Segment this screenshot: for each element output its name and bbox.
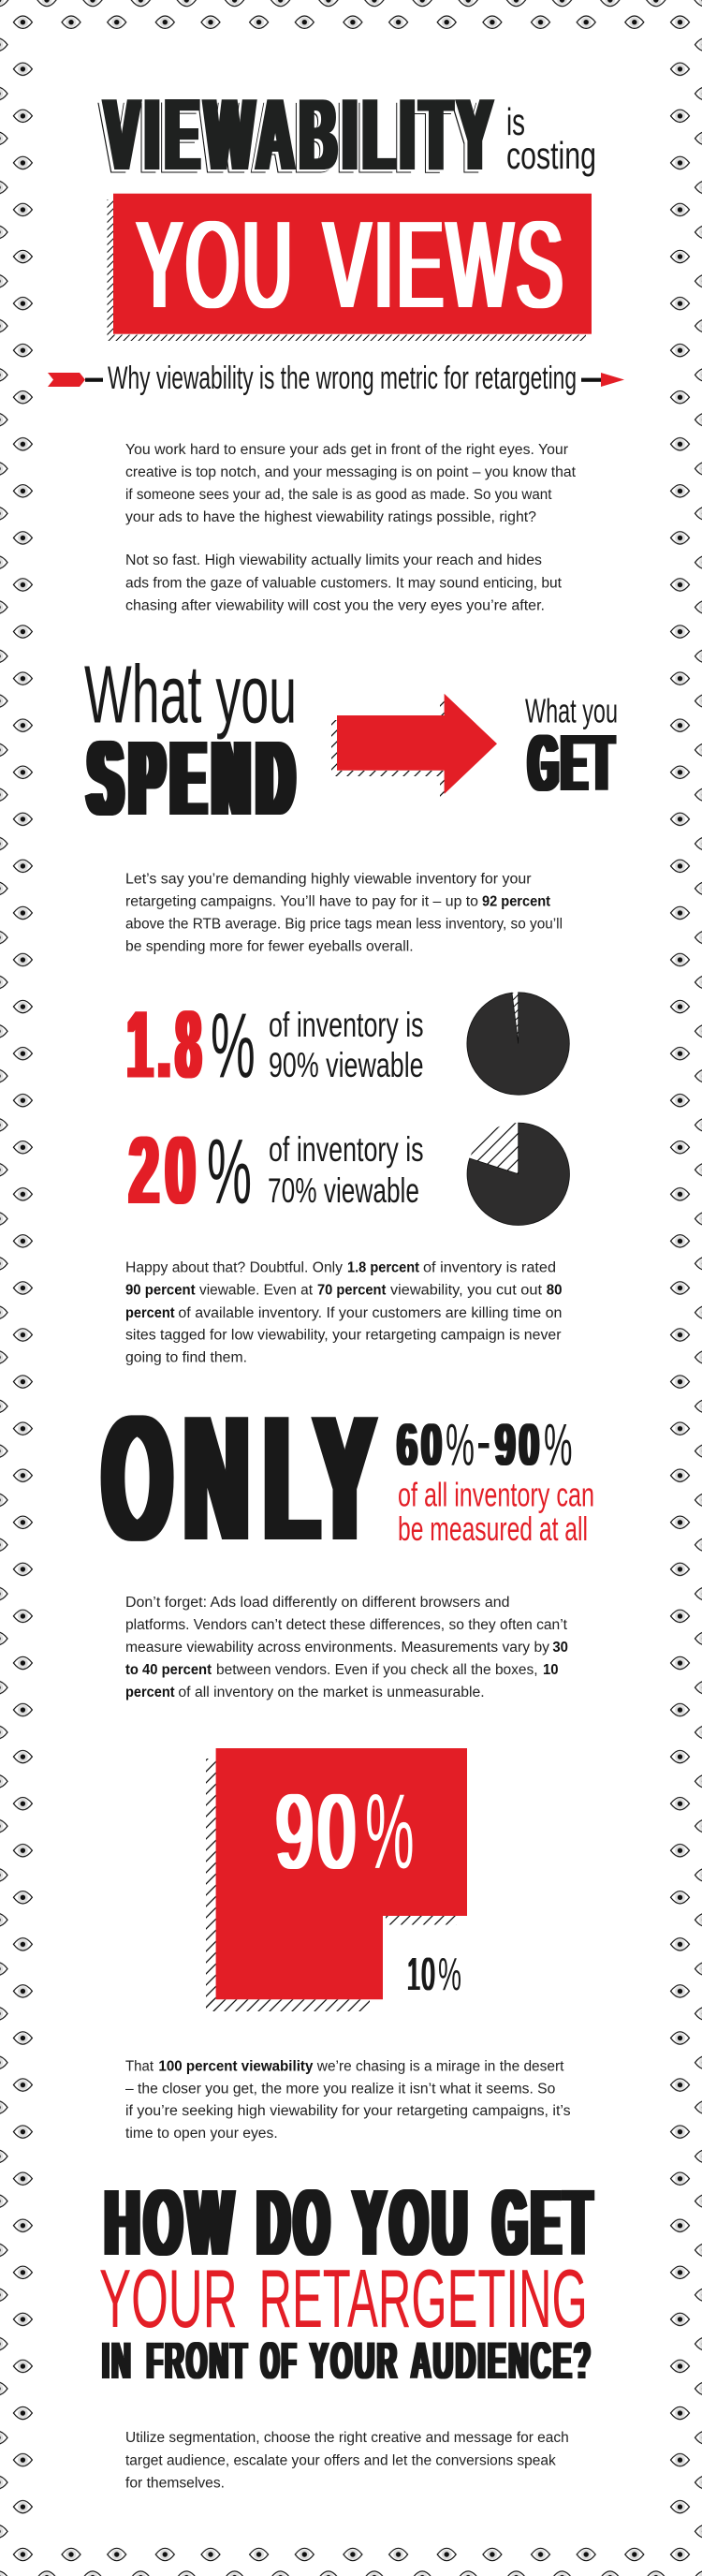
heading: what you get: What you — [525, 692, 618, 730]
paragraph: don't forget: of all inventory on the market is unmeasurable. — [178, 1685, 485, 1700]
title: is costing: costing — [506, 134, 596, 177]
stat: 20 percent: of inventory is — [269, 1130, 424, 1169]
90 percent L-shaped block — [206, 1748, 467, 2011]
paragraph: mirage in the desert: time to open your eyes. — [125, 2126, 278, 2142]
paragraph: mirage in the desert: 100 percent viewability — [158, 2058, 314, 2074]
paragraph: don't forget: percent — [125, 1685, 175, 1700]
text: of all inventory can be measured: of all inventory can — [398, 1476, 594, 1514]
intro paragraph two: Not so fast. High viewability actually limits your reach and hides — [125, 552, 542, 568]
stat: 20 percent: 20 — [129, 1117, 201, 1224]
heading: only: ONLY — [103, 1378, 374, 1577]
paragraph: happy about that: 70 percent — [317, 1283, 386, 1298]
paragraph: happy about that: viewable. Even at — [199, 1283, 314, 1298]
paragraph: don't forget: measure viewability across environments. Measurements vary by — [125, 1640, 549, 1656]
stat: 60 to 90 percent: 60 — [397, 1412, 446, 1478]
intro paragraph two: ads from the gaze of valuable customers. It may sound enticing, but — [125, 575, 563, 592]
paragraph: highly viewable inventory: retargeting campaigns. You’ll have to pay for it – up to — [125, 893, 478, 910]
paragraph: mirage in the desert: if you’re seeking high viewability for your retargeting campaigns, it’s — [125, 2103, 571, 2119]
red arrow — [331, 694, 497, 799]
paragraph: happy about that: of available inventory. If your customers are killing time on — [178, 1305, 562, 1321]
text: of all inventory can be measured — [398, 1476, 594, 1548]
heading: what you get — [525, 692, 618, 808]
subtitle with arrow — [48, 361, 624, 396]
stat: 60 to 90 percent — [397, 1412, 573, 1478]
stat: 1.8 percent: of inventory is — [269, 1006, 424, 1044]
stat: 1.8 percent — [127, 991, 424, 1097]
paragraph: mirage in the desert: we’re chasing is a mirage in the desert — [316, 2058, 564, 2074]
paragraph: don't forget: to 40 percent — [125, 1662, 212, 1678]
10 percent label: 10 — [407, 1950, 436, 2000]
you views banner: YOU — [137, 196, 296, 333]
paragraph: don't forget: 10 — [543, 1662, 559, 1678]
closing paragraph: for themselves. — [125, 2475, 225, 2491]
heading: how do you get your retargeting in front of your audience: IN — [102, 2331, 133, 2390]
paragraph: happy about that: Happy about that? Doubtful. Only — [125, 1260, 343, 1276]
arrow head: right — [581, 373, 624, 387]
paragraph: happy about that — [125, 1260, 562, 1366]
paragraph: happy about that: of inventory is rated — [423, 1260, 556, 1276]
paragraph: don't forget: Don’t forget: Ads load differently on different browsers and — [125, 1595, 509, 1611]
you views banner — [107, 194, 592, 341]
paragraph: highly viewable inventory: Let’s say you’re demanding highly viewable inventory for your — [125, 872, 532, 888]
90 percent L-shaped block: 90 — [276, 1773, 360, 1891]
stat: 20 percent — [129, 1117, 424, 1224]
stat: 20 percent: % — [207, 1120, 252, 1223]
paragraph: happy about that: 90 percent — [125, 1283, 196, 1298]
paragraph: happy about that: 80 — [547, 1283, 562, 1298]
paragraph: highly viewable inventory: above the RTB average. Big price tags mean less inventory, so you’ll — [125, 916, 563, 932]
heading: how do you get your retargeting in front of your audience: YOUR — [310, 2331, 399, 2390]
intro paragraph one — [125, 442, 577, 525]
heading: what you spend — [84, 650, 301, 837]
paragraph: happy about that: sites tagged for low viewability, your retargeting campaign is never — [125, 1328, 562, 1344]
intro paragraph one: You work hard to ensure your ads get in front of the right eyes. Your — [125, 442, 568, 458]
intro paragraph one: if someone sees your ad, the sale is as good as made. So you want — [125, 487, 552, 503]
90 percent L-shaped block: % — [365, 1773, 415, 1891]
title: is costing: is — [506, 100, 525, 143]
heading: how do you get your retargeting in front of your audience: YOU — [354, 2171, 472, 2275]
paragraph: mirage in the desert: – the closer you get, the more you realize it isn’t what it seems. So — [125, 2081, 555, 2098]
arrow tail: left — [48, 373, 103, 387]
closing paragraph: target audience, escalate your offers and let the conversions speak — [125, 2452, 556, 2468]
paragraph: mirage in the desert — [125, 2058, 571, 2142]
heading: how do you get your retargeting in front of your audience — [99, 2171, 595, 2390]
paragraph: highly viewable inventory: 92 percent — [482, 893, 550, 910]
paragraph: don't forget: between vendors. Even if you check all the boxes, — [216, 1662, 538, 1678]
heading: how do you get your retargeting in front of your audience: HOW — [105, 2171, 238, 2275]
stat: 20 percent: 70% viewable — [268, 1171, 419, 1210]
pie chart: 20 percent — [467, 1123, 569, 1225]
intro paragraph two: chasing after viewability will cost you the very eyes you’re after. — [125, 597, 545, 614]
title: viewability — [101, 78, 498, 195]
intro paragraph one: your ads to have the highest viewability ratings possible, right? — [125, 509, 536, 525]
paragraph: happy about that: going to find them. — [125, 1350, 247, 1366]
closing paragraph — [125, 2430, 569, 2491]
pie chart: 1.8 percent — [467, 993, 569, 1095]
text: of all inventory can be measured: be measured at all — [398, 1509, 588, 1548]
stat: 1.8 percent: 90% viewable — [269, 1046, 424, 1084]
paragraph: mirage in the desert: That — [125, 2058, 154, 2074]
paragraph: highly viewable inventory — [125, 872, 563, 955]
heading: how do you get your retargeting in front of your audience: FRONT — [146, 2331, 249, 2390]
paragraph: don't forget — [125, 1595, 568, 1700]
stat: 1.8 percent: % — [211, 994, 256, 1097]
paragraph: happy about that: percent — [125, 1305, 175, 1321]
stat: 60 to 90 percent: % — [446, 1412, 475, 1478]
paragraph: don't forget: platforms. Vendors can’t detect these differences, so they often can’t — [125, 1617, 568, 1633]
paragraph: don't forget: 30 — [552, 1640, 568, 1656]
heading: how do you get your retargeting in front of your audience: DO — [257, 2171, 333, 2275]
intro paragraph one: creative is top notch, and your messaging is on point – you know that — [125, 464, 577, 480]
text: SPEND — [89, 719, 301, 837]
intro paragraph two — [125, 552, 563, 614]
paragraph: happy about that: viewability, you cut out — [390, 1283, 543, 1298]
heading: what you spend: What you — [84, 650, 297, 741]
closing paragraph: Utilize segmentation, choose the right creative and message for each — [125, 2430, 569, 2446]
paragraph: highly viewable inventory: be spending more for fewer eyeballs overall. — [125, 939, 414, 955]
heading: how do you get your retargeting in front of your audience: YOUR — [99, 2252, 238, 2345]
paragraph: happy about that: 1.8 percent — [347, 1260, 419, 1276]
heading: how do you get your retargeting in front of your audience: OF — [260, 2331, 298, 2390]
10 percent label: % — [438, 1950, 461, 2000]
stat: 60 to 90 percent: % — [544, 1412, 573, 1478]
stat: 60 to 90 percent: 90 — [495, 1412, 543, 1478]
title: is costing — [506, 100, 596, 177]
stat: 1.8 percent: 1.8 — [127, 991, 206, 1097]
